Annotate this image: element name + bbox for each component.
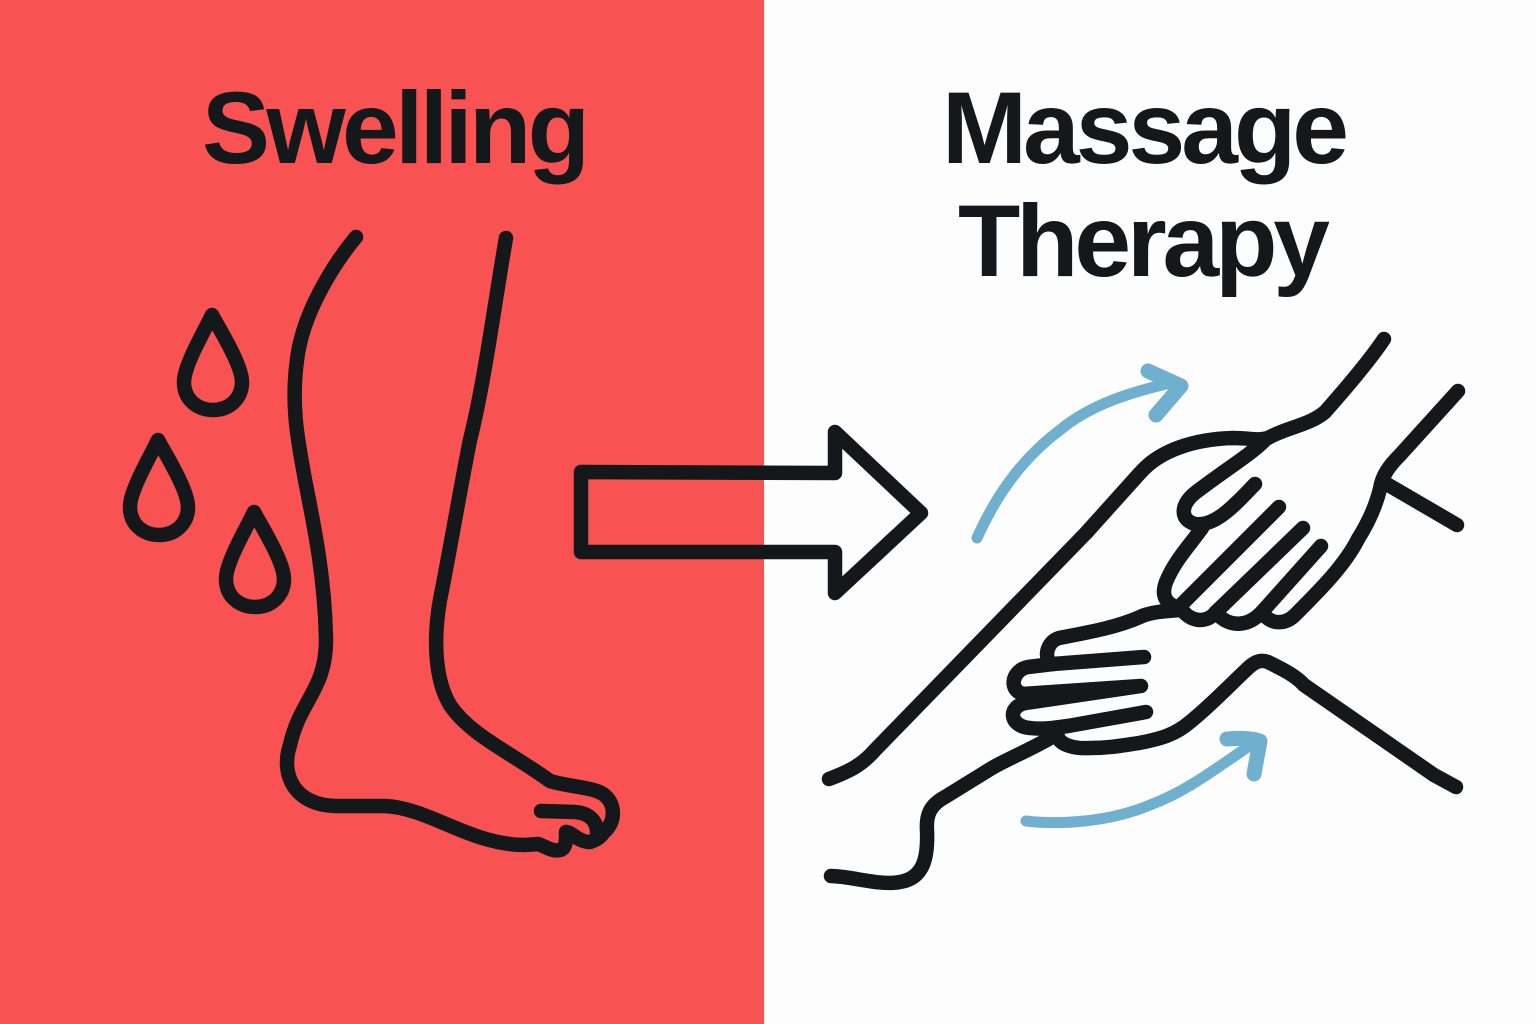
arrow: swelling to massage <box>581 432 921 593</box>
icon: massaging hands <box>829 339 1458 883</box>
icon: water drop right <box>226 512 284 607</box>
icon: water drop top <box>184 315 242 410</box>
icon: swollen leg and foot <box>287 237 613 850</box>
panel: massage therapy background <box>764 0 1536 1024</box>
heading: Massage Therapy: Massage <box>942 71 1349 185</box>
heading: Massage Therapy <box>942 71 1349 298</box>
icon: water drop left <box>130 440 188 535</box>
upper arm and hand <box>829 339 1458 779</box>
panel: swelling background <box>0 0 764 1024</box>
heading: Swelling: Swelling <box>202 71 590 185</box>
arrow: blue upper stroke <box>977 371 1181 538</box>
heading: Massage Therapy: Therapy <box>958 184 1330 298</box>
arrow: blue lower stroke <box>1026 738 1260 823</box>
lower arm and hand <box>831 610 1456 883</box>
